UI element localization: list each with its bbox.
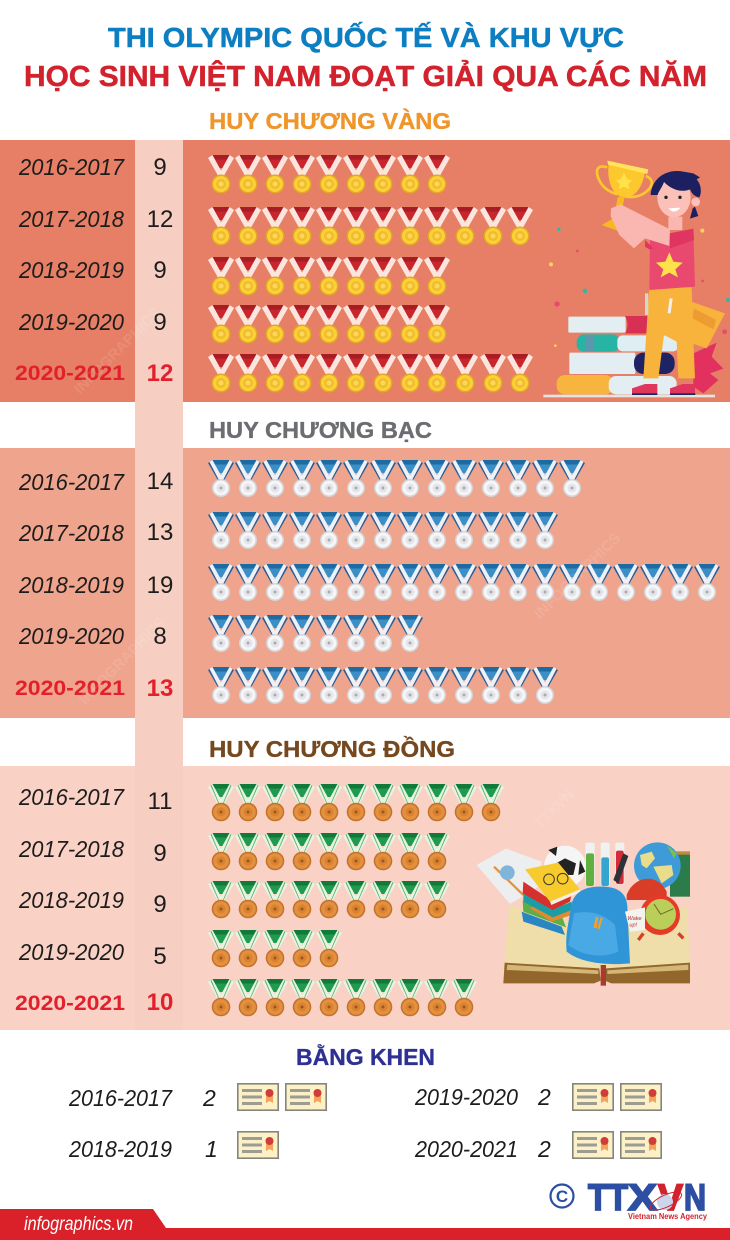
silver row 2019-2020 xyxy=(18,615,423,652)
bronze row 2017-2018 xyxy=(18,833,450,870)
logo: TTXVN copyright xyxy=(550,1177,707,1221)
title: THI OLYMPIC QUỐC TẾ VÀ KHU VỰC xyxy=(108,21,624,53)
bronze row 2016-2017 xyxy=(18,784,504,821)
commendation 2018-2019: 2018-2019 xyxy=(68,1136,172,1162)
silver row 2019-2020: 2019-2020 xyxy=(18,623,124,649)
gold row 2020-2021: 12 xyxy=(147,360,173,387)
gold panel background xyxy=(0,140,730,402)
silver row 2016-2017: 14 xyxy=(147,468,173,495)
silver row 2016-2017 xyxy=(18,460,585,497)
logo: TTXVN copyright: Vietnam News Agency xyxy=(628,1211,707,1221)
logo: TTXVN copyright: N xyxy=(684,1177,706,1218)
gold row 2016-2017: 2016-2017 xyxy=(18,154,125,180)
gold row 2016-2017: 9 xyxy=(153,154,167,181)
bronze row 2018-2019 xyxy=(18,881,450,918)
gold row 2018-2019 xyxy=(18,257,450,296)
bronze row 2016-2017: 2016-2017 xyxy=(18,784,125,810)
commendation 2019-2020: 2 xyxy=(537,1084,551,1110)
commendation 2019-2020 xyxy=(414,1084,661,1110)
silver row 2020-2021 xyxy=(15,667,558,704)
gold row 2018-2019: 2018-2019 xyxy=(18,257,124,283)
logo: TTXVN copyright: V xyxy=(658,1177,683,1218)
illustration: open book with school supplies: up! xyxy=(629,923,638,929)
bronze row 2018-2019: 9 xyxy=(153,891,167,918)
silver panel background xyxy=(0,448,730,718)
silver row 2020-2021: 13 xyxy=(147,675,173,702)
title xyxy=(24,21,707,93)
silver row 2017-2018: 2017-2018 xyxy=(18,520,124,546)
gold row 2019-2020: 9 xyxy=(153,309,167,336)
title: HỌC SINH VIỆT NAM ĐOẠT GIẢI QUA CÁC NĂM xyxy=(24,59,707,93)
commendation 2020-2021 xyxy=(414,1132,661,1162)
bronze row 2019-2020: 5 xyxy=(153,943,167,970)
commendation 2020-2021: 2 xyxy=(537,1136,551,1162)
gold row 2020-2021: 2020-2021 xyxy=(15,362,125,385)
silver row 2017-2018: 13 xyxy=(147,519,173,546)
gold row 2017-2018: 2017-2018 xyxy=(18,206,124,232)
silver row 2017-2018 xyxy=(18,512,558,549)
text: INFOGRAPHICS xyxy=(531,529,624,623)
gold row 2020-2021 xyxy=(15,354,533,392)
bronze row 2017-2018: 2017-2018 xyxy=(18,836,124,862)
commendation 2020-2021: 2020-2021 xyxy=(414,1136,518,1162)
text: INFOGRAPHICS xyxy=(71,304,164,398)
text: TTXVN xyxy=(531,786,578,833)
commendation 2018-2019 xyxy=(68,1132,278,1162)
logo: TTXVN copyright: X xyxy=(628,1177,657,1218)
silver row 2018-2019: 2018-2019 xyxy=(18,572,124,598)
bronze row 2019-2020: 2019-2020 xyxy=(18,939,124,965)
bronze panel background xyxy=(0,766,730,1030)
silver row 2018-2019: 19 xyxy=(147,572,173,599)
commendation 2016-2017: 2016-2017 xyxy=(68,1085,173,1111)
gold row 2017-2018 xyxy=(18,206,533,246)
bronze row 2020-2021 xyxy=(15,979,477,1016)
section: commendations xyxy=(68,1043,661,1162)
bronze row 2019-2020 xyxy=(18,930,342,970)
silver row 2018-2019 xyxy=(18,564,720,601)
illustration: open book with school supplies xyxy=(477,842,691,986)
heading: silver: HUY CHƯƠNG BẠC xyxy=(209,417,432,443)
gold row 2019-2020 xyxy=(18,305,450,344)
footer bar xyxy=(0,1209,730,1240)
commendation 2016-2017: 2 xyxy=(202,1085,216,1111)
bronze row 2020-2021: 2020-2021 xyxy=(15,992,125,1015)
bronze row 2020-2021: 10 xyxy=(147,989,173,1016)
heading: commendations: BẰNG KHEN xyxy=(296,1043,435,1070)
gold row 2017-2018: 12 xyxy=(147,206,173,233)
illustration: open book with school supplies: Wake xyxy=(627,916,642,922)
logo: TTXVN copyright: T xyxy=(608,1177,628,1218)
illustration: student with trophy on books xyxy=(543,161,730,397)
commendation 2018-2019: 1 xyxy=(205,1136,218,1162)
bronze row 2017-2018: 9 xyxy=(153,840,167,867)
bronze row 2016-2017: 11 xyxy=(148,788,172,815)
logo: TTXVN copyright: C xyxy=(556,1187,568,1206)
footer bar: infographics.vn xyxy=(24,1214,133,1235)
heading: gold: HUY CHƯƠNG VÀNG xyxy=(209,107,451,134)
panel: bronze medals xyxy=(0,735,730,1030)
heading: bronze: HUY CHƯƠNG ĐỒNG xyxy=(209,735,455,762)
panel: gold medals xyxy=(0,107,730,402)
silver row 2020-2021: 2020-2021 xyxy=(15,677,125,700)
bronze row 2018-2019: 2018-2019 xyxy=(18,887,124,913)
center column band xyxy=(135,140,183,1030)
panel: silver medals xyxy=(0,417,730,718)
commendation 2016-2017 xyxy=(68,1084,326,1111)
gold row 2019-2020: 2019-2020 xyxy=(18,309,124,335)
gold row 2016-2017 xyxy=(18,154,450,194)
logo: TTXVN copyright: T xyxy=(588,1177,608,1218)
silver row 2016-2017: 2016-2017 xyxy=(18,469,125,495)
gold row 2018-2019: 9 xyxy=(153,257,167,284)
commendation 2019-2020: 2019-2020 xyxy=(414,1084,518,1110)
text: INFOGRAPHICS xyxy=(76,614,169,708)
silver row 2019-2020: 8 xyxy=(153,623,167,650)
